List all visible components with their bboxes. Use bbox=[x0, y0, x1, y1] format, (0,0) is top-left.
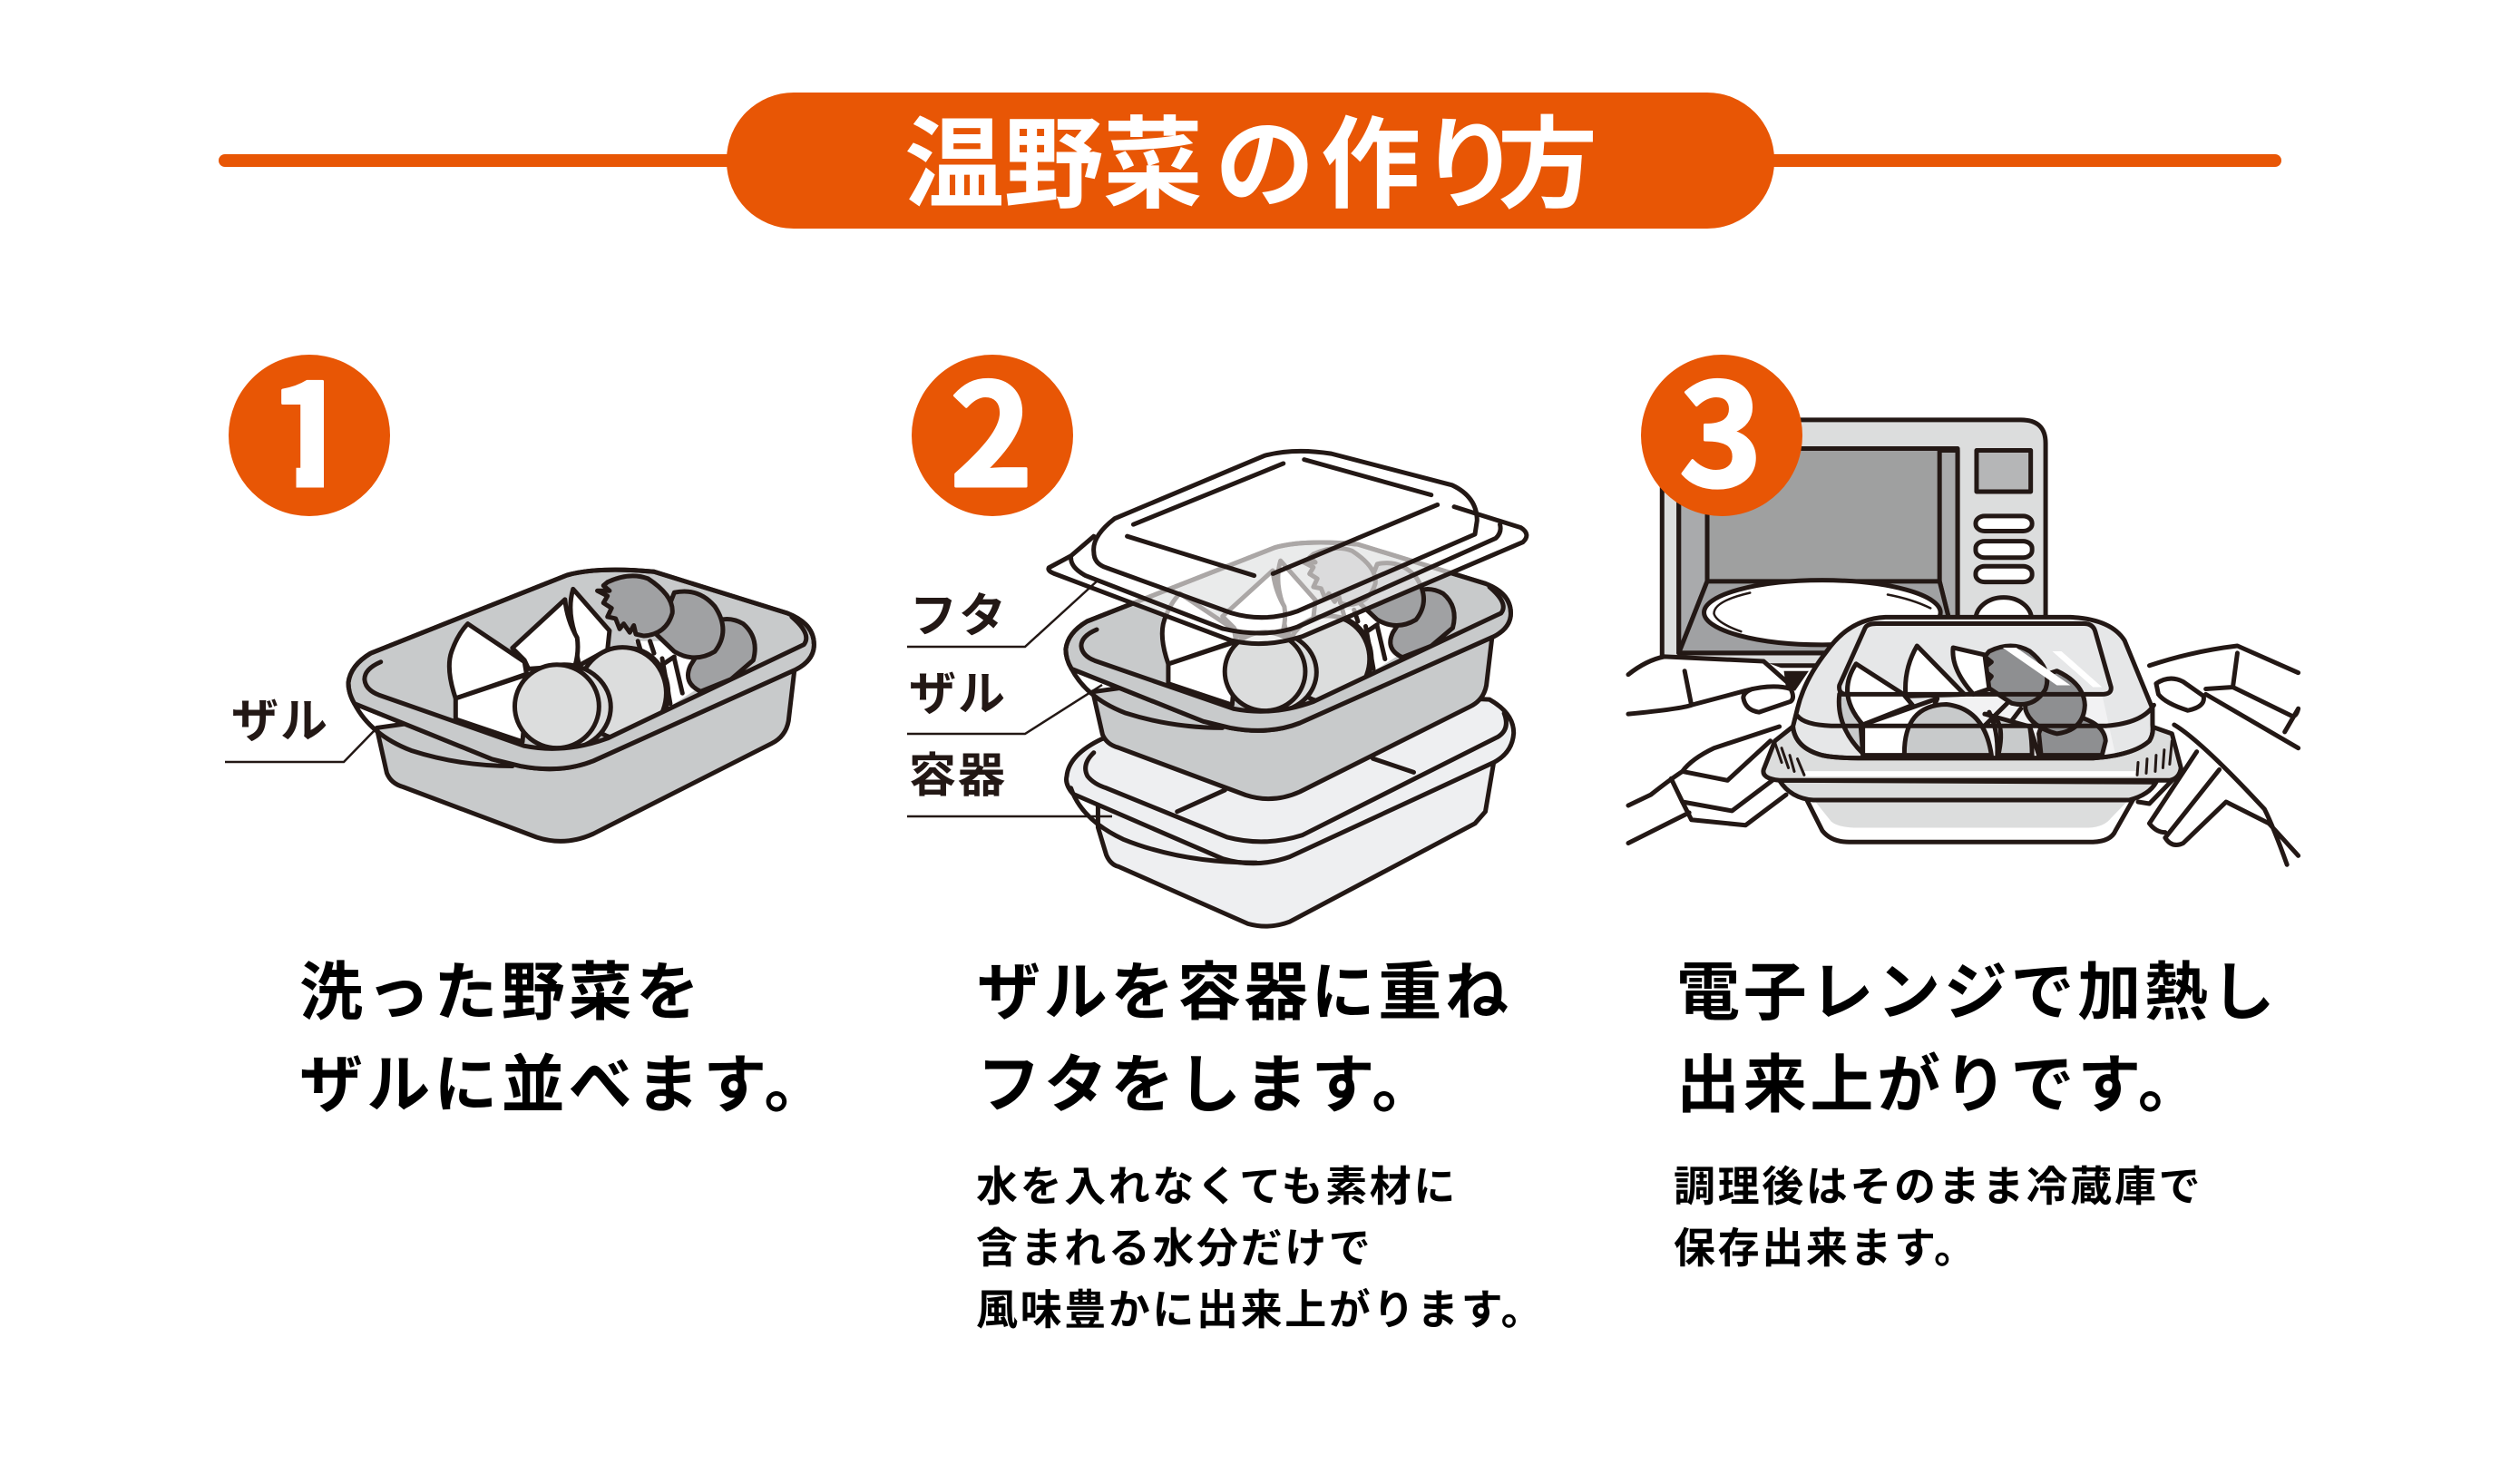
step 2 heading: フタをします。 bbox=[977, 1050, 1439, 1120]
step 1 heading: 洗った野菜を bbox=[299, 957, 703, 1028]
title banner bbox=[219, 93, 2281, 229]
illustration: stacked container, basket, lid bbox=[1049, 451, 1527, 926]
label: ザル: ザル bbox=[909, 669, 1007, 721]
number badge 2: 2 bbox=[950, 322, 1033, 527]
step 2 note: 水を入れなくても素材に bbox=[976, 1163, 1458, 1210]
step 3 note: 調理後はそのまま冷蔵庫で bbox=[1674, 1163, 2202, 1210]
banner rule bbox=[219, 154, 2281, 167]
panel: step 2 bbox=[907, 322, 1545, 1333]
panel: step 1 bbox=[225, 322, 832, 1120]
step 2 note: 風味豊かに出来上がります。 bbox=[976, 1286, 1545, 1333]
banner pill bbox=[727, 93, 1774, 229]
number badge 2 bbox=[912, 322, 1073, 527]
right hand bbox=[2138, 646, 2299, 864]
label: フタ bbox=[907, 581, 1098, 647]
container bbox=[1067, 689, 1514, 926]
label: 容器: 容器 bbox=[909, 750, 1007, 803]
step 1 heading: ザルに並べます。 bbox=[299, 1050, 832, 1120]
number badge 1: 1 bbox=[268, 322, 351, 527]
illustration: microwave and hands holding container bbox=[1628, 420, 2299, 864]
label: ザル bbox=[907, 669, 1102, 734]
illustration: basket with vegetables bbox=[348, 570, 814, 841]
number badge 3 bbox=[1641, 322, 1802, 527]
left hand bbox=[1628, 657, 1813, 843]
step 2 note: 含まれる水分だけで bbox=[976, 1225, 1372, 1272]
step 2 heading: ザルを容器に重ね bbox=[977, 957, 1512, 1028]
label: ザル: ザル bbox=[231, 696, 329, 748]
step 3 note: 保存出来ます。 bbox=[1674, 1225, 1978, 1272]
number badge 1 bbox=[229, 322, 390, 527]
step 3 heading: 電子レンジで加熱し bbox=[1676, 957, 2278, 1028]
microwave bbox=[1662, 420, 2046, 666]
lid bbox=[1049, 451, 1527, 644]
label: フタ: フタ bbox=[910, 591, 1008, 643]
title: 温野菜の作り方 bbox=[904, 110, 1597, 221]
panel: step 3 bbox=[1628, 322, 2299, 1272]
number badge 3: 3 bbox=[1679, 322, 1763, 527]
step 3 heading: 出来上がりです。 bbox=[1676, 1050, 2205, 1120]
container with lid, front view bbox=[1763, 617, 2181, 842]
label: ザル bbox=[225, 696, 375, 762]
basket bbox=[1066, 542, 1510, 799]
